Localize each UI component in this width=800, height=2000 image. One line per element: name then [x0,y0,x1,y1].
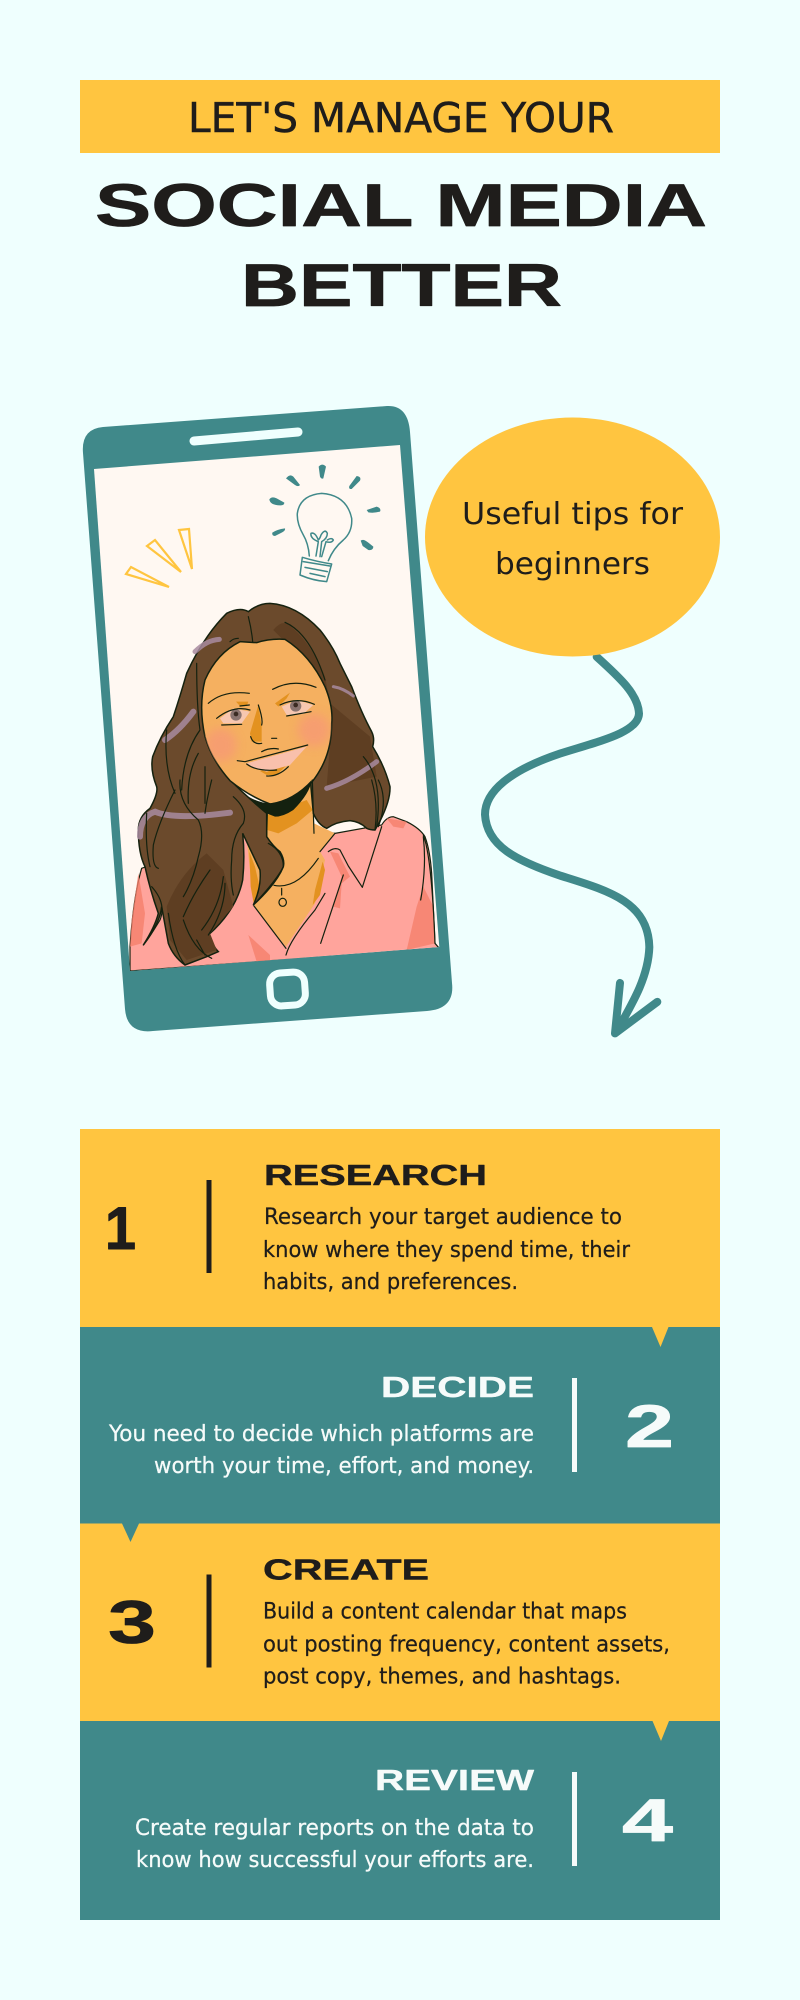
hair [138,603,390,965]
main title: SOCIAL MEDIA [95,172,707,239]
step 1 heading: RESEARCH [264,1160,487,1192]
step 1 text: Research your target audience to [264,1204,622,1230]
step 3 text: out posting frequency, content assets, [263,1632,670,1658]
speech bubble [425,418,720,656]
step 2 pointer [122,1524,139,1542]
portrait illustration [130,603,439,971]
blush [205,713,330,762]
phone home button [269,971,306,1007]
step 2 text: worth your time, effort, and money. [154,1453,534,1479]
phone speaker [194,432,298,441]
bulb rays [269,465,380,550]
step 2 divider [572,1378,577,1472]
step 3 divider [206,1574,212,1668]
panel: step 4 review [80,1721,720,1920]
face [202,639,332,804]
step 3 text: Build a content calendar that maps [263,1598,627,1624]
darker hair [167,623,377,960]
step 1 text: habits, and preferences. [263,1269,518,1295]
step 4 number: 4 [622,1787,674,1854]
step 1 divider [206,1180,212,1273]
step 4 text [135,1815,534,1873]
bubble text: Useful tips for [462,497,684,532]
bubble text [462,497,684,582]
step 1 text [263,1204,631,1295]
necklace [274,858,318,906]
eyes [208,683,316,725]
step 3 heading: CREATE [263,1554,429,1586]
step 1 number: 1 [105,1195,136,1262]
main title: BETTER [241,252,562,319]
shirt shadows [130,818,435,962]
step 4 text: Create regular reports on the data to [135,1815,534,1841]
mouth [237,745,308,776]
banner text: LET'S MANAGE YOUR [188,94,614,142]
hair highlights [140,639,377,837]
neck and chest [247,783,335,947]
shirt [130,817,439,971]
collar and shirt lines [254,827,435,955]
step 2 heading: DECIDE [381,1372,534,1404]
step 2 text [108,1421,534,1479]
step 2 text: You need to decide which platforms are [108,1421,534,1447]
step 4 text: know how successful your efforts are. [136,1847,534,1873]
step 1 pointer [652,1327,668,1347]
step 2 number: 2 [625,1393,674,1460]
panel: step 2 decide [80,1327,720,1524]
phone with portrait [83,406,452,1031]
phone body [83,406,452,1031]
phone screen [94,445,439,971]
bubble text: beginners [495,547,650,582]
arrow [485,657,657,1033]
panel: step 3 create [80,1524,720,1721]
hair strands [143,617,383,965]
step 1 text: know where they spend time, their [263,1237,631,1263]
step 3 text: post copy, themes, and hashtags. [263,1664,621,1690]
light bulb icon [269,465,380,582]
eye and nose shadows [236,693,290,742]
neck underside shadow [248,780,312,817]
step 3 text [263,1598,670,1690]
step 4 heading: REVIEW [375,1765,535,1797]
step 3 number: 3 [108,1589,156,1656]
main title [95,172,707,319]
sparkle lines [126,529,192,587]
neck shadows [249,800,325,905]
step 4 divider [572,1772,577,1866]
panel: step 1 research [80,1129,720,1327]
nose [251,705,277,744]
bulb outline [297,493,352,582]
step 3 pointer [652,1721,669,1741]
title banner [80,80,720,153]
